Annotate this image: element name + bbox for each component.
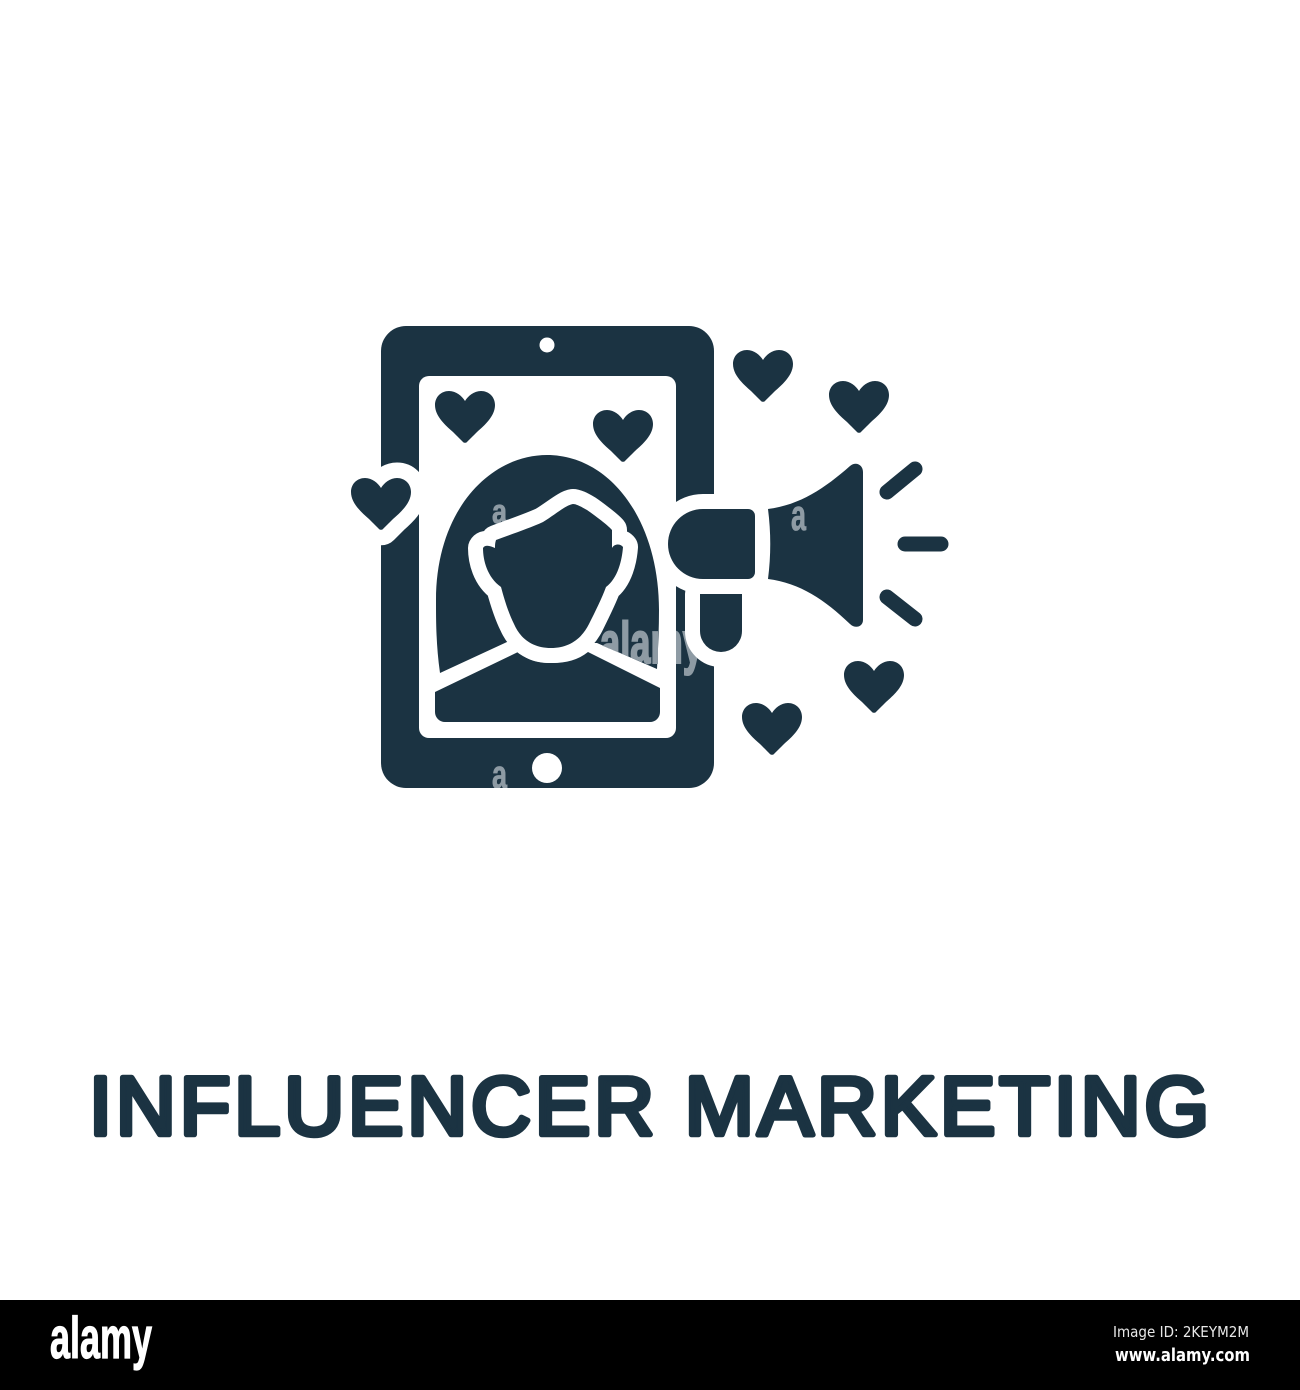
icon: woman's shoulders (435, 652, 660, 722)
footer image id: Image ID: 2KEYM2M (1113, 1323, 1249, 1341)
footer bar (0, 1300, 1300, 1390)
watermark: alamy marks behind face and megaphone (492, 493, 703, 676)
icon: heart overlapping tablet left edge (351, 478, 411, 530)
icon: heart on screen top right (593, 410, 653, 462)
watermark: alamy marks on horn and tablet base: a (492, 753, 508, 797)
footer logo: alamy (50, 1306, 152, 1371)
icon: woman's hair (436, 455, 659, 673)
icon: heart upper right (829, 381, 889, 433)
icon: heart lower middle (742, 703, 802, 755)
footer website: www.alamy.com (1115, 1345, 1250, 1366)
watermark: alamy marks on horn and tablet base (492, 491, 806, 797)
watermark: alamy marks on horn and tablet base: a (791, 491, 806, 540)
watermark: alamy marks behind face and megaphone: alamy (600, 611, 703, 676)
icon: influencer on tablet with megaphone and hearts (351, 326, 941, 788)
icon: heart on screen top left (435, 391, 495, 443)
title: INFLUENCER MARKETING (89, 1060, 1209, 1152)
icon: megaphone sound rays (887, 469, 941, 619)
icon: heart upper middle (733, 350, 793, 402)
icon: megaphone (668, 464, 863, 652)
watermark: alamy marks behind face and megaphone: a (492, 493, 508, 531)
icon: woman's face (483, 504, 623, 648)
icon: heart lower right (844, 661, 904, 713)
infographic canvas (0, 326, 1300, 1390)
icon: tablet (381, 326, 714, 788)
